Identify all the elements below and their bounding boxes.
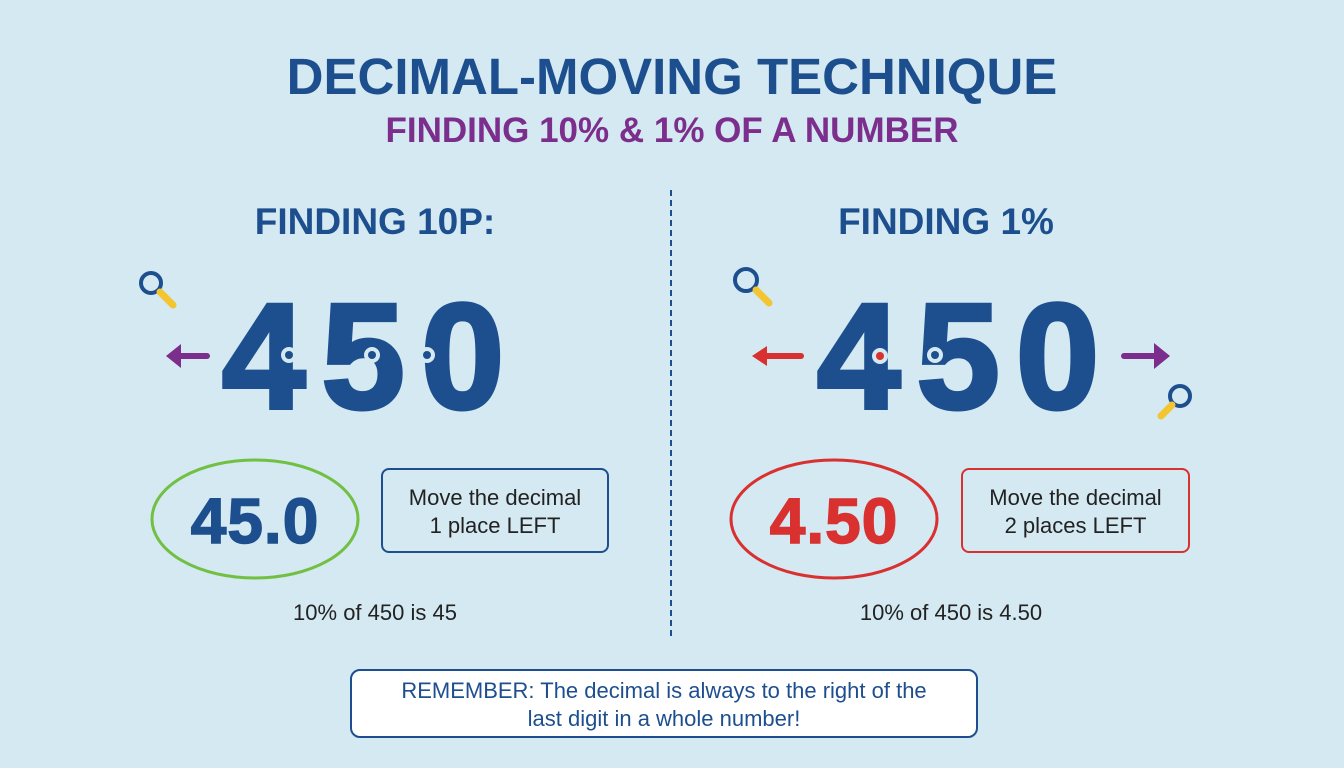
right caption: 10% of 450 is 4.50 — [860, 600, 1042, 625]
arrow: red left — [752, 346, 801, 366]
left heading: FINDING 10P: — [255, 201, 495, 242]
remember callout — [350, 669, 978, 738]
right number 450: 450 — [817, 272, 1115, 440]
left instruction box — [381, 468, 609, 553]
decimal markers left — [281, 347, 435, 363]
decimal markers right — [872, 347, 943, 364]
remember callout: REMEMBER: The decimal is always to the right of the — [401, 678, 927, 703]
subtitle: FINDING 10% & 1% OF A NUMBER — [385, 111, 959, 150]
ellipse: 45.0: 45.0 — [191, 485, 319, 557]
divider — [670, 190, 672, 636]
left instruction box: 1 place LEFT — [430, 513, 560, 538]
icon: magnifier right top — [735, 269, 769, 303]
ellipse: 45.0 — [152, 460, 358, 578]
ellipse: 4.50: 4.50 — [770, 485, 898, 557]
right heading: FINDING 1% — [838, 201, 1054, 242]
left caption: 10% of 450 is 45 — [293, 600, 457, 625]
right instruction box — [961, 468, 1190, 553]
right instruction box: Move the decimal — [989, 485, 1162, 510]
left instruction box: Move the decimal — [409, 485, 581, 510]
icon: magnifier right bottom — [1161, 386, 1190, 416]
right instruction box: 2 places LEFT — [1005, 513, 1146, 538]
title: DECIMAL-MOVING TECHNIQUE — [287, 48, 1057, 105]
ellipse: 4.50 — [731, 460, 937, 578]
icon: magnifier left — [141, 273, 173, 305]
left number 450: 450 — [222, 272, 520, 440]
arrow: purple right — [1124, 343, 1170, 369]
arrow: left purple — [166, 344, 207, 368]
remember callout: last digit in a whole number! — [528, 706, 800, 731]
